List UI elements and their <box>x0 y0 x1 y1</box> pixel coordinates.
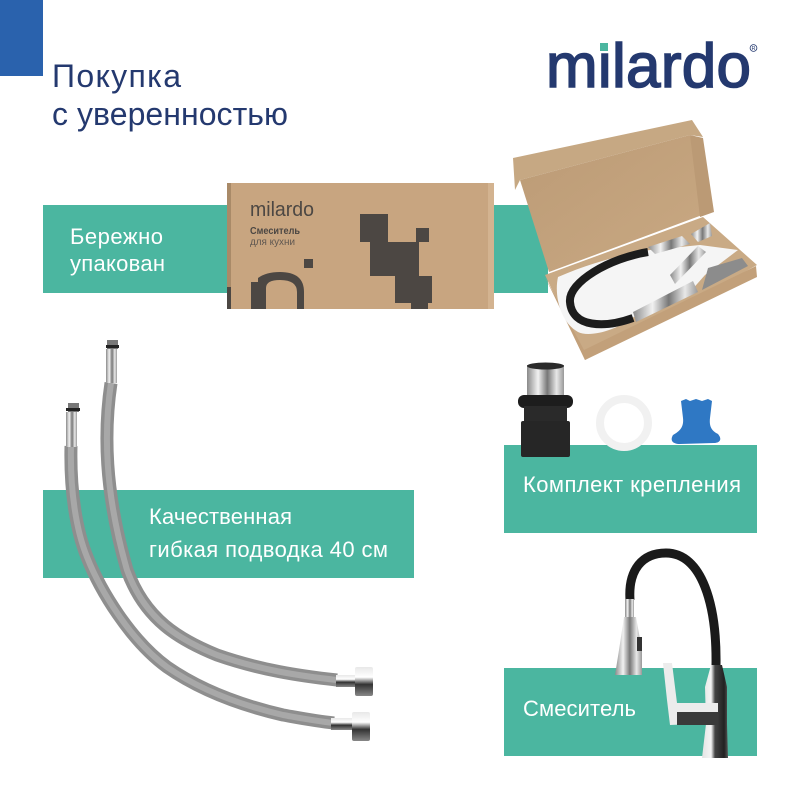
box base <box>545 217 757 360</box>
faucet lever <box>663 663 718 725</box>
box brand: milardo <box>250 199 314 221</box>
hose: upper <box>106 340 373 696</box>
panel: carefully packed band <box>43 205 548 293</box>
rubber washer <box>600 399 648 447</box>
label: flexible hoses: Качественная <box>149 504 292 529</box>
label: mounting kit: Комплект крепления <box>523 472 741 497</box>
label: flexible hoses <box>149 504 388 562</box>
mounting nut <box>518 362 573 457</box>
faucet <box>615 553 728 758</box>
box product name: Смеситель <box>250 226 300 237</box>
title <box>52 58 288 132</box>
box product subtitle: для кухни <box>250 237 295 248</box>
label: carefully packed: упакован <box>70 251 165 276</box>
blue aerator key <box>672 399 720 444</box>
box m mark <box>251 259 313 309</box>
box lid <box>513 120 703 190</box>
panel: mounting kit band <box>504 445 757 533</box>
logo: milardo: milardo <box>546 32 751 101</box>
label: carefully packed <box>70 224 165 276</box>
label: faucet: Смеситель <box>523 696 636 721</box>
black hose <box>570 252 648 324</box>
flexible hoses <box>66 340 373 741</box>
open cardboard box with faucet <box>513 120 757 360</box>
white cloth <box>557 245 738 334</box>
small parts <box>702 258 748 290</box>
faucet body <box>702 665 728 758</box>
flexible black spout <box>630 553 716 666</box>
hose: lower <box>66 403 370 741</box>
chrome faucet body <box>633 223 712 322</box>
logo: milardo: R <box>752 46 756 52</box>
label: flexible hoses: гибкая подводка 40 см <box>149 537 388 562</box>
panel: flexible hoses band <box>43 490 414 578</box>
pull-out spray head <box>615 599 642 675</box>
label: carefully packed: Бережно <box>70 224 163 249</box>
panel: faucet band <box>504 668 757 756</box>
title: с уверенностью <box>52 96 288 132</box>
title: Покупка <box>52 58 181 94</box>
box pixel pattern <box>360 214 432 309</box>
closed cardboard box <box>227 183 494 309</box>
blue corner block <box>0 0 43 76</box>
